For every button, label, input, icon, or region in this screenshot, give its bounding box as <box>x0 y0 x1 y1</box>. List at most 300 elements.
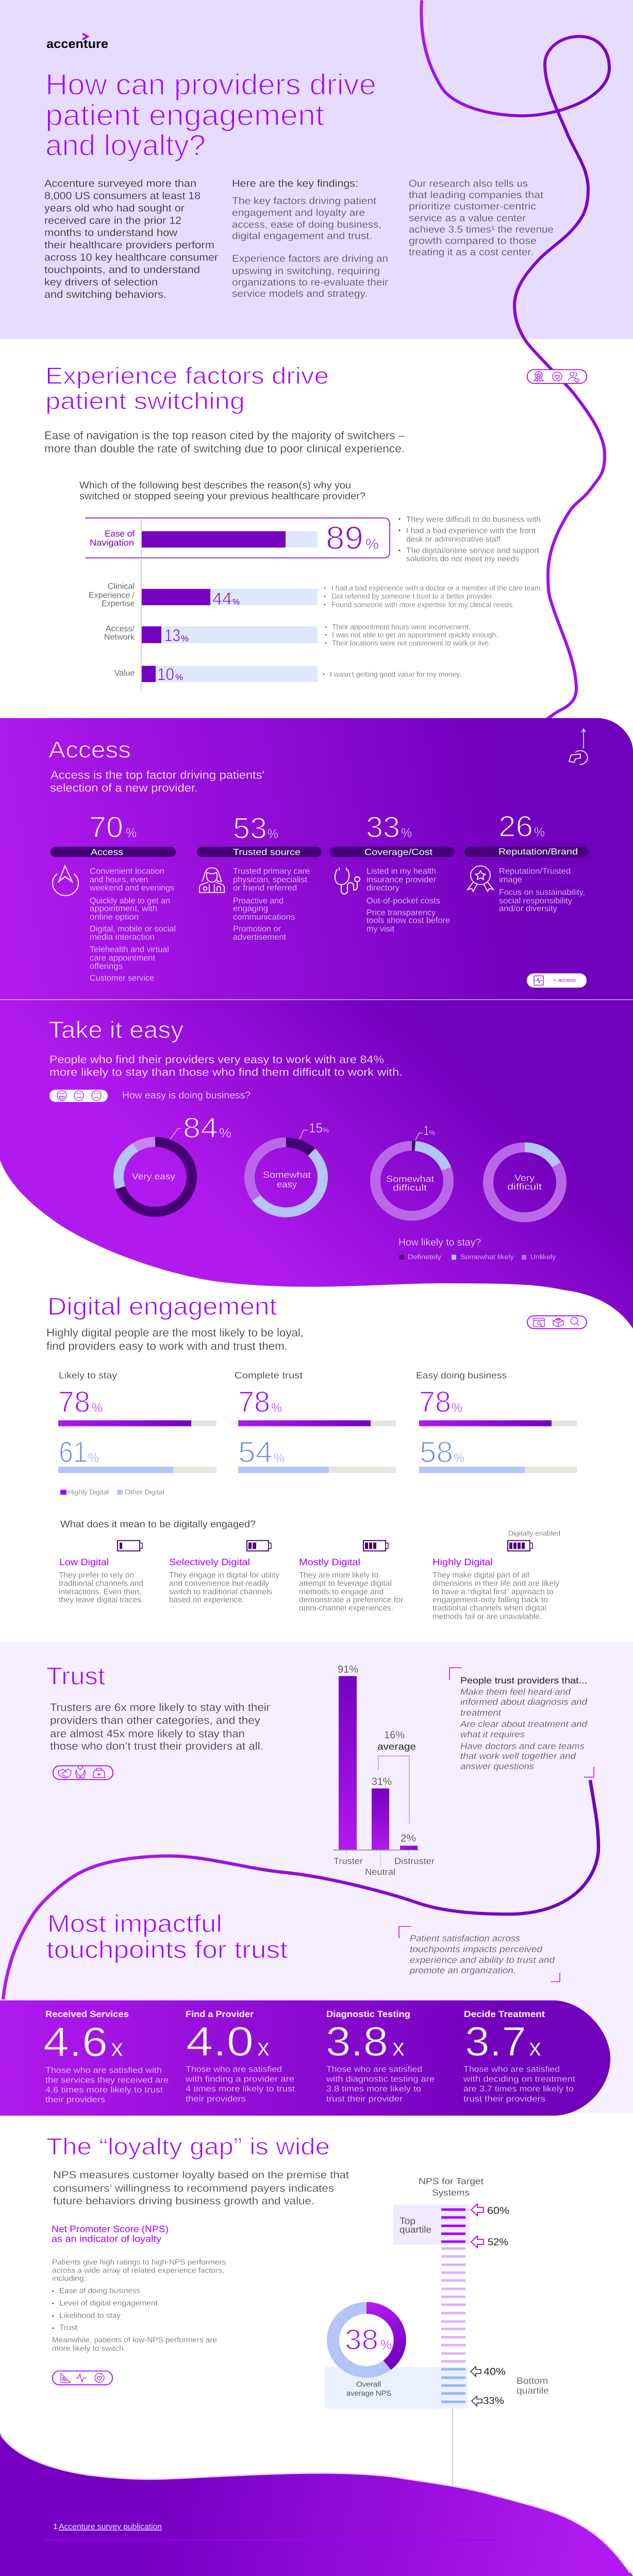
icon pill: browser, blocks, search <box>527 1316 587 1329</box>
callout: people trust providers: Are clear about treatment and <box>460 1719 588 1729</box>
column: trusted source stat: 53 <box>233 811 267 845</box>
donut: somewhat difficult <box>372 1123 452 1219</box>
icon: battery low <box>118 1540 142 1551</box>
text block: patient ratings <box>52 2258 226 2353</box>
stat: received services: Received Services <box>45 2009 129 2019</box>
text block: digital subhead: Highly digital people are the most likely to be loyal, <box>46 1326 304 1339</box>
text block: patient ratings: Trust <box>59 2324 78 2332</box>
legend: digital: Other Digital <box>125 1488 164 1496</box>
access factor list: Digital, mobile or social <box>90 924 176 934</box>
arrow: 52%: 52% <box>488 2237 508 2248</box>
label: bottom quartile: Bottom <box>517 2376 548 2386</box>
text block: trust description: providers than other categories, and they <box>50 1714 260 1726</box>
bar chart: trust levels <box>334 1664 435 1877</box>
donut: somewhat easy <box>235 1121 338 1227</box>
text block: nps description: NPS measures customer loyalty based on the premise that <box>53 2170 349 2181</box>
text block: patient ratings: Likelihood to stay <box>59 2311 121 2320</box>
access factor list: care appointment <box>90 953 155 962</box>
access factor list: media interaction <box>90 933 155 942</box>
text block: survey description: across 10 key healthcare consumer <box>44 252 218 263</box>
card: highly digital: methods fail or are unavailable. <box>432 1613 542 1621</box>
reputation list <box>499 867 585 913</box>
icon pill: award, heart, people <box>527 369 587 383</box>
heading: experience factors: patient switching <box>45 388 245 414</box>
bar: value <box>114 665 318 684</box>
band background <box>0 2001 610 2116</box>
stat: decide treatment: Those who are satisfied <box>463 2064 560 2074</box>
panel: intro <box>0 0 633 339</box>
average bracket <box>378 1756 409 1823</box>
card: selectively digital: switch to traditional channels <box>169 1588 272 1596</box>
title: patient engagement <box>45 98 324 131</box>
text block: digital subhead: find providers easy to work with and trust them. <box>46 1340 288 1352</box>
text block: patient ratings: Ease of doing business <box>59 2286 140 2295</box>
chart axis <box>141 519 142 691</box>
icon: battery full <box>508 1540 532 1551</box>
icon pill: faces <box>49 1090 108 1102</box>
text block: research note: prioritize customer-centric <box>409 201 536 212</box>
callout: patient satisfaction: promote an organization. <box>409 1965 516 1975</box>
access background <box>0 718 633 999</box>
stat: received services: x <box>111 2034 123 2061</box>
card: low digital: traditional channels and <box>59 1580 143 1588</box>
text block: trust description <box>50 1701 270 1752</box>
metric: easy doing business: 58 <box>420 1435 453 1469</box>
callout: patient satisfaction <box>399 1926 560 1981</box>
footer rule <box>45 2539 495 2540</box>
card: low digital: they leave digital traces. <box>59 1596 143 1604</box>
label: bottom quartile <box>517 2376 549 2396</box>
card: mostly digital: Mostly Digital <box>299 1557 360 1568</box>
footnote: source: Accenture survey publication <box>59 2523 162 2531</box>
bar: ease of navigation: 89 <box>326 519 363 556</box>
coverage list: Out-of-pocket costs <box>367 896 440 905</box>
card: highly digital: Highly Digital <box>432 1557 493 1568</box>
metric: likely to stay <box>58 1370 216 1473</box>
icon: award rosette <box>468 866 493 891</box>
text block: key findings: The key factors driving patient <box>232 196 376 207</box>
text block: survey description: key drivers of selection <box>44 277 158 288</box>
text block: research note: growth compared to those <box>409 235 537 246</box>
donut: overall average nps: 38 <box>345 2324 378 2355</box>
icon: location arrow <box>53 866 78 895</box>
subheading: net promoter score: Net Promoter Score (NPS) <box>52 2224 169 2234</box>
stat: decide treatment: 3.7 <box>465 2018 526 2064</box>
ribbon: trust curve <box>3 1780 598 1999</box>
subheading: net promoter score <box>52 2224 169 2244</box>
metric: complete trust: % <box>274 1450 285 1465</box>
card: selectively digital <box>169 1540 279 1604</box>
icon pill: access tag <box>527 973 587 988</box>
card: low digital: interactions. Even then, <box>59 1588 141 1596</box>
heading: take it easy: Take it easy <box>48 1017 184 1043</box>
access factor list: offerings <box>90 961 123 971</box>
bar chart: trust levels: 31% <box>372 1776 392 1787</box>
donut: somewhat easy: % <box>323 1126 329 1134</box>
bullet list: clinical reasons <box>324 584 542 609</box>
metric: easy doing business: 78 <box>419 1385 451 1418</box>
title <box>45 68 376 162</box>
stat: received services: 4.6 <box>43 2019 108 2065</box>
access factor list: Customer service <box>90 973 154 982</box>
card: highly digital: dimensions in their life and are likely <box>432 1580 559 1588</box>
footer wave <box>0 2434 633 2576</box>
trusted source list: Trusted primary care <box>233 867 310 876</box>
reputation list: Reputation/Trusted <box>499 867 571 876</box>
card: mostly digital: They are more likely to <box>299 1571 378 1580</box>
bar: truster <box>339 1676 357 1850</box>
text block: nps description: future behaviors driving business growth and value. <box>53 2196 314 2207</box>
heading: what does it mean: What does it mean to be digitally engaged? <box>60 1519 256 1530</box>
bullet list: clinical reasons: I had a bad experience with a doctor or a member of the care team. <box>331 584 542 592</box>
icon pill: access tag: + access <box>553 978 576 983</box>
metric: complete trust: 78 <box>238 1385 270 1418</box>
reputation list: Focus on sustainability, <box>499 888 585 897</box>
title: and loyalty? <box>45 129 206 162</box>
chart title: NPS for Target <box>419 2176 484 2186</box>
bar: clinical experience: Experience / <box>89 590 135 600</box>
bullet list: clinical reasons: Got referred by someone I trust to a better provider. <box>331 592 494 601</box>
stat: decide treatment: are 3.7 times more likely to <box>463 2084 574 2094</box>
text block: patient ratings: including: <box>52 2275 86 2283</box>
text block: research note <box>409 178 554 258</box>
bullet list: navigation reasons: desk or administrative staff <box>406 535 501 544</box>
metric: easy doing business: Easy doing business <box>416 1370 507 1381</box>
chart title: Systems <box>432 2188 470 2197</box>
access factor list: and hours, even <box>90 875 148 884</box>
chart title <box>419 2176 484 2197</box>
text: how easy question: How easy is doing business? <box>122 1090 251 1101</box>
icon pill: ruler, pulse, heart <box>53 2371 112 2385</box>
donut: very easy: Very easy <box>132 1172 175 1181</box>
panel: trust <box>0 1642 633 2116</box>
bar: value: 10 <box>157 665 174 684</box>
column: coverage cost stat: % <box>401 825 412 840</box>
reputation list: image <box>499 875 522 884</box>
text block: survey description <box>44 178 218 300</box>
text block: trust description: Trusters are 6x more likely to stay with their <box>50 1701 270 1714</box>
stat: decide treatment: Decide Treatment <box>464 2009 545 2019</box>
column: trusted source stat: % <box>268 826 278 841</box>
metric: likely to stay: 61 <box>59 1435 88 1469</box>
text block: access subhead <box>50 768 264 794</box>
chart question <box>79 480 365 502</box>
highlight frame <box>85 518 390 558</box>
panel: access <box>0 718 633 999</box>
icon: doctor <box>199 868 225 892</box>
column: access stat: 70 <box>89 811 123 844</box>
chart: nps for target systems <box>325 2176 549 2409</box>
arrow: 40% <box>471 2366 506 2378</box>
text block: patient ratings: across a wide array of related experience factors, <box>52 2266 224 2275</box>
bar: value: % <box>175 673 183 682</box>
stat: diagnostic testing: with diagnostic testing are <box>326 2074 435 2083</box>
access factor list: weekend and evenings <box>89 883 174 892</box>
card: mostly digital <box>299 1540 404 1613</box>
bar chart: trust levels: Truster <box>334 1856 363 1866</box>
text block: nps description: consumers’ willingness to recommend payers indicates <box>53 2183 334 2194</box>
bar: ease of navigation: Navigation <box>90 538 134 548</box>
text block: key findings <box>232 178 388 299</box>
trusted source list: Promotion or <box>233 924 281 934</box>
access factor list: Telehealth and virtual <box>90 945 169 954</box>
card: low digital <box>59 1540 143 1604</box>
callout: patient satisfaction: experience and ability to trust and <box>410 1955 555 1965</box>
text block: patient ratings: Level of digital engagement <box>59 2299 158 2308</box>
footnote: source: 1 <box>53 2523 58 2531</box>
panel: footer <box>0 2409 633 2576</box>
arrow: 40%: 40% <box>484 2366 506 2378</box>
subheading: net promoter score: as an indicator of loyalty <box>52 2234 162 2244</box>
stat: received services <box>43 2009 169 2105</box>
heading: experience factors <box>45 363 329 414</box>
stat: decide treatment <box>463 2009 575 2104</box>
heading: digital engagement: Digital engagement <box>47 1293 277 1320</box>
donut: very difficult <box>488 1147 561 1217</box>
trusted source list: or friend referred <box>233 883 297 892</box>
bar: distruster <box>400 1845 418 1850</box>
card: mostly digital: methods to engage and <box>299 1588 384 1596</box>
card: low digital: They prefer to rely on <box>59 1571 134 1580</box>
bar: clinical experience: Expertise <box>102 599 135 608</box>
arrow: 60% <box>471 2204 509 2216</box>
text block: survey description: and switching behaviors. <box>44 289 166 300</box>
donut: overall average nps: average NPS <box>346 2389 391 2398</box>
card: mostly digital: attempt to leverage digital <box>299 1580 392 1588</box>
callout: people trust providers: informed about diagnosis and <box>460 1697 588 1707</box>
wave edge highlight <box>1 2435 630 2572</box>
legend: how likely to stay: Unlikely <box>530 1253 556 1261</box>
dash scale <box>441 2208 465 2403</box>
panel: loyalty gap <box>46 2134 549 2409</box>
donut: overall average nps: % <box>380 2337 392 2352</box>
callout: people trust providers: Have doctors and care teams <box>460 1741 585 1751</box>
bar: ease of navigation <box>90 519 379 556</box>
text block: survey description: Accenture surveyed more than <box>44 178 196 189</box>
coverage list <box>367 867 450 934</box>
bar chart: trust levels: average <box>377 1742 416 1752</box>
text block: subhead: Ease of navigation is the top reason cited by the majority of switchers – <box>44 429 405 442</box>
stat: diagnostic testing <box>326 2009 435 2104</box>
donut: overall average nps: Overall <box>356 2380 381 2389</box>
title: How can providers drive <box>45 68 376 101</box>
bar: access network <box>104 624 318 645</box>
chart question: Which of the following best describes the reason(s) why you <box>79 480 351 491</box>
text block: survey description: years old who had sought or <box>44 202 185 214</box>
trusted source list: engaging <box>233 904 268 913</box>
bar: ease of navigation: % <box>365 536 379 552</box>
card: highly digital: They make digital part of all <box>432 1571 529 1580</box>
stat: find a provider: with finding a provider are <box>185 2074 294 2083</box>
card: selectively digital: based on experience. <box>169 1596 244 1604</box>
column: access stat: Access <box>91 847 123 857</box>
panel: touchpoint stats <box>0 2001 610 2116</box>
bar: value: Value <box>114 668 135 677</box>
callout: people trust providers: answer questions <box>460 1761 534 1771</box>
legend: how likely to stay: Somewhat likely <box>460 1253 514 1261</box>
chart question: switched or stopped seeing your previous healthcare provider? <box>79 491 365 502</box>
panel: experience factors <box>44 363 587 691</box>
stat: find a provider: x <box>257 2033 270 2061</box>
text block: key findings: organizations to re-evaluate their <box>232 277 388 288</box>
column: trusted source stat: Trusted source <box>233 847 301 857</box>
icon: stethoscope <box>335 868 360 894</box>
bar chart: trust levels: Neutral <box>365 1867 395 1877</box>
text block: survey description: received care in the prior 12 <box>44 215 181 226</box>
text block: research note: treating it as a cost center. <box>409 247 534 258</box>
column: coverage cost stat: Coverage/Cost <box>364 847 432 857</box>
stat: find a provider: their providers <box>186 2094 246 2104</box>
reputation list: social responsibility <box>499 896 572 905</box>
reputation list: and/or diversity <box>499 904 557 913</box>
donut: somewhat difficult: 1 <box>424 1123 429 1138</box>
stat: received services: the services they received are <box>45 2075 169 2084</box>
card: mostly digital: demonstrate a preference for <box>299 1596 404 1604</box>
bar: clinical experience: % <box>232 597 240 607</box>
bar: access network: 13 <box>164 626 180 645</box>
donut: somewhat difficult: % <box>429 1129 435 1137</box>
text block: research note: achieve 3.5 times¹ the revenue <box>409 224 554 235</box>
card: mostly digital: omni-channel experiences. <box>299 1604 393 1613</box>
stat: diagnostic testing: trust their provider <box>326 2094 403 2104</box>
trusted source list: advertisement <box>233 933 286 942</box>
callout: people trust providers: Make them feel heard and <box>460 1687 571 1697</box>
ribbon: top decorative curve <box>421 2 609 720</box>
callout: patient satisfaction: Patient satisfaction across <box>410 1934 520 1943</box>
legend: how likely to stay: Definetely <box>408 1253 441 1261</box>
stat: received services: 4.6 times more likely to trust <box>45 2085 163 2094</box>
column: access stat <box>51 811 176 982</box>
card: highly digital: to have a “digital first” approach to <box>432 1588 554 1596</box>
bullet list: navigation reasons <box>399 516 541 563</box>
coverage list: Listed in my health <box>367 867 436 876</box>
heading: trust: Trust <box>46 1663 105 1690</box>
bar: clinical experience <box>89 582 318 608</box>
arrow: up with hand icon <box>569 729 588 765</box>
top quartile box <box>393 2205 470 2245</box>
donut: very difficult: Very <box>514 1173 535 1183</box>
label: bottom quartile: quartile <box>517 2386 549 2396</box>
stat: diagnostic testing: 3.8 <box>326 2018 388 2064</box>
trusted source list <box>233 867 310 942</box>
text block: patient ratings: Meanwhile, patients of low-NPS performers are <box>52 2336 217 2344</box>
bar: access network: Access/ <box>106 624 135 633</box>
label: digitally enabled: Digitally enabled <box>508 1529 560 1537</box>
access factor list: Convenient location <box>90 867 164 876</box>
card: selectively digital: and convenience but readily <box>169 1580 269 1588</box>
text block: survey description: touchpoints, and to understand <box>44 264 200 276</box>
legend: how likely to stay <box>398 1237 556 1261</box>
text block: key findings: service models and strategy. <box>232 289 368 299</box>
stat: find a provider: Find a Provider <box>186 2009 254 2019</box>
column: reputation stat: % <box>534 824 545 839</box>
stat: find a provider: 4.0 <box>186 2018 254 2064</box>
icon pill: handshake, hands, kit <box>53 1766 113 1780</box>
bullet list: value reason: I wasn’t getting good value for my money. <box>330 670 461 679</box>
bullet list: access reasons: I was not able to get an appointment quickly enough. <box>332 631 498 639</box>
text block: nps description <box>53 2170 349 2207</box>
arrow: 33% <box>472 2396 504 2406</box>
bar chart: trust levels: 16% <box>384 1730 405 1741</box>
chart: nps for target systems: quartile <box>399 2225 431 2235</box>
bullet list: navigation reasons: The digital/online service and support <box>406 547 540 555</box>
heading: access: Access <box>48 736 131 762</box>
callout: people trust providers: People trust providers that... <box>460 1675 587 1685</box>
legend: digital <box>60 1488 164 1496</box>
column: trusted source stat <box>197 811 322 942</box>
text block: key findings: upswing in switching, requiring <box>232 266 380 277</box>
text block: key findings: Here are the key findings: <box>232 178 358 189</box>
bullet list: navigation reasons: They were difficult to do business with <box>406 516 541 524</box>
baseline and ticks <box>334 1850 419 1851</box>
stat: decide treatment: with deciding on treatment <box>463 2074 575 2083</box>
donut: very difficult: difficult <box>507 1182 542 1192</box>
stat: diagnostic testing: Those who are satisfied <box>326 2064 422 2074</box>
stat: diagnostic testing: x <box>392 2033 405 2061</box>
card: highly digital: engagement-only falling back to <box>432 1596 548 1604</box>
bullet list: access reasons: Their appointment hours were inconvenient. <box>332 623 471 631</box>
donut: very easy: 84 <box>183 1112 218 1144</box>
bar chart: trust levels: 91% <box>338 1664 358 1675</box>
column: coverage cost stat: 33 <box>366 811 400 844</box>
bar: clinical experience: 44 <box>212 589 232 608</box>
text block: trust description: are almost 45x more likely to stay than <box>50 1727 245 1740</box>
access factor list: online option <box>90 912 139 922</box>
metric: likely to stay: Likely to stay <box>59 1370 118 1381</box>
stat: diagnostic testing: 3.8 times more likely to <box>326 2084 421 2094</box>
donut: overall average nps <box>333 2308 400 2398</box>
stat: received services: their providers <box>45 2095 105 2105</box>
metric: complete trust: 54 <box>238 1435 273 1469</box>
metric: likely to stay: % <box>92 1400 103 1415</box>
trusted source list: physician, specialist <box>233 875 307 884</box>
text block: subhead <box>44 429 405 455</box>
stat: decide treatment: x <box>529 2033 541 2061</box>
metric: easy doing business <box>416 1370 577 1473</box>
text block: survey description: months to understand how <box>44 227 178 239</box>
coverage list: Price transparency <box>367 908 436 917</box>
text block: access subhead: Access is the top factor driving patients' <box>51 768 264 781</box>
metric: likely to stay: 78 <box>58 1385 90 1418</box>
legend: digital: Highly Digital <box>68 1488 109 1496</box>
column: reputation stat: 26 <box>498 810 533 843</box>
bar chart: trust levels: 2% <box>401 1833 416 1844</box>
text block: subhead: more than double the rate of switching due to poor clinical experience. <box>44 442 405 455</box>
text block: survey description: 8,000 US consumers at least 18 <box>44 190 201 201</box>
column: reputation stat: Reputation/Brand <box>498 846 578 857</box>
text block: digital subhead <box>46 1326 304 1352</box>
heading: most impactful touchpoints: Most impactful <box>47 1910 222 1937</box>
heading: experience factors: Experience factors drive <box>45 363 329 389</box>
callout: people trust providers <box>449 1668 594 1777</box>
heading: loyalty gap: The “loyalty gap” is wide <box>46 2134 330 2160</box>
bullet list: access reasons <box>325 623 498 648</box>
bar chart: trust levels: Distruster <box>394 1856 435 1866</box>
logo: accenture: accenture <box>46 37 108 51</box>
donut: very easy <box>105 1112 231 1225</box>
heading: most impactful touchpoints <box>46 1910 288 1963</box>
stat: diagnostic testing: Diagnostic Testing <box>326 2009 410 2019</box>
access factor list: appointment, with <box>90 904 157 913</box>
callout: people trust providers: treatment <box>460 1708 502 1718</box>
callout: patient satisfaction: touchpoints impacts perceived <box>410 1944 543 1954</box>
take it easy background <box>0 1000 633 1329</box>
card: highly digital <box>432 1540 559 1621</box>
intro background <box>0 0 633 339</box>
bar: access network: % <box>181 634 189 643</box>
text block: research note: that leading companies that <box>409 190 543 200</box>
text block: key findings: engagement and loyalty are <box>232 208 365 218</box>
